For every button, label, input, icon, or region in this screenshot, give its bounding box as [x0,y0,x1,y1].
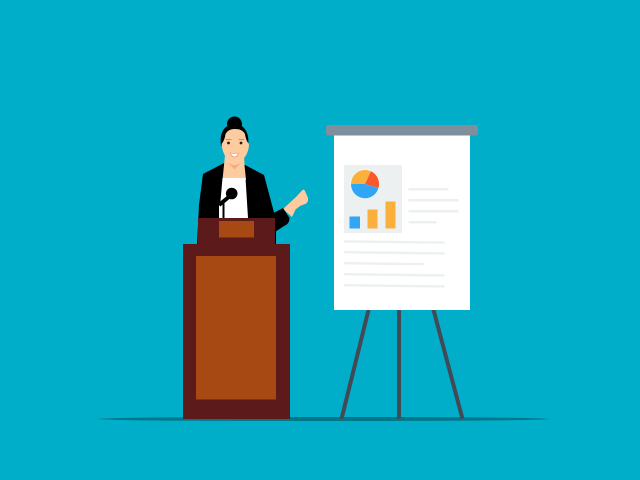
shirt [219,178,248,218]
easel legs [342,308,462,417]
podium [183,218,290,419]
chart panel [344,165,402,233]
ground shadow [97,417,550,421]
lower text lines [344,240,444,288]
neck shadow [228,163,241,170]
hair [221,124,248,146]
jacket [197,163,276,244]
podium top plate [219,221,254,238]
microphone [219,188,238,219]
face [222,129,249,164]
smile [230,153,238,157]
jacket sleeve [262,208,290,236]
podium front panel [196,256,276,400]
eyes [226,139,244,144]
pie chart [350,170,380,198]
flip chart paper [326,125,478,310]
bar chart [350,202,396,228]
podium top [198,218,275,245]
hair bun [227,116,242,132]
side text lines [408,188,458,223]
podium base [183,244,290,419]
neck [222,155,246,180]
hand [283,190,308,217]
flip chart top bar [326,125,478,136]
presenter [197,116,308,244]
